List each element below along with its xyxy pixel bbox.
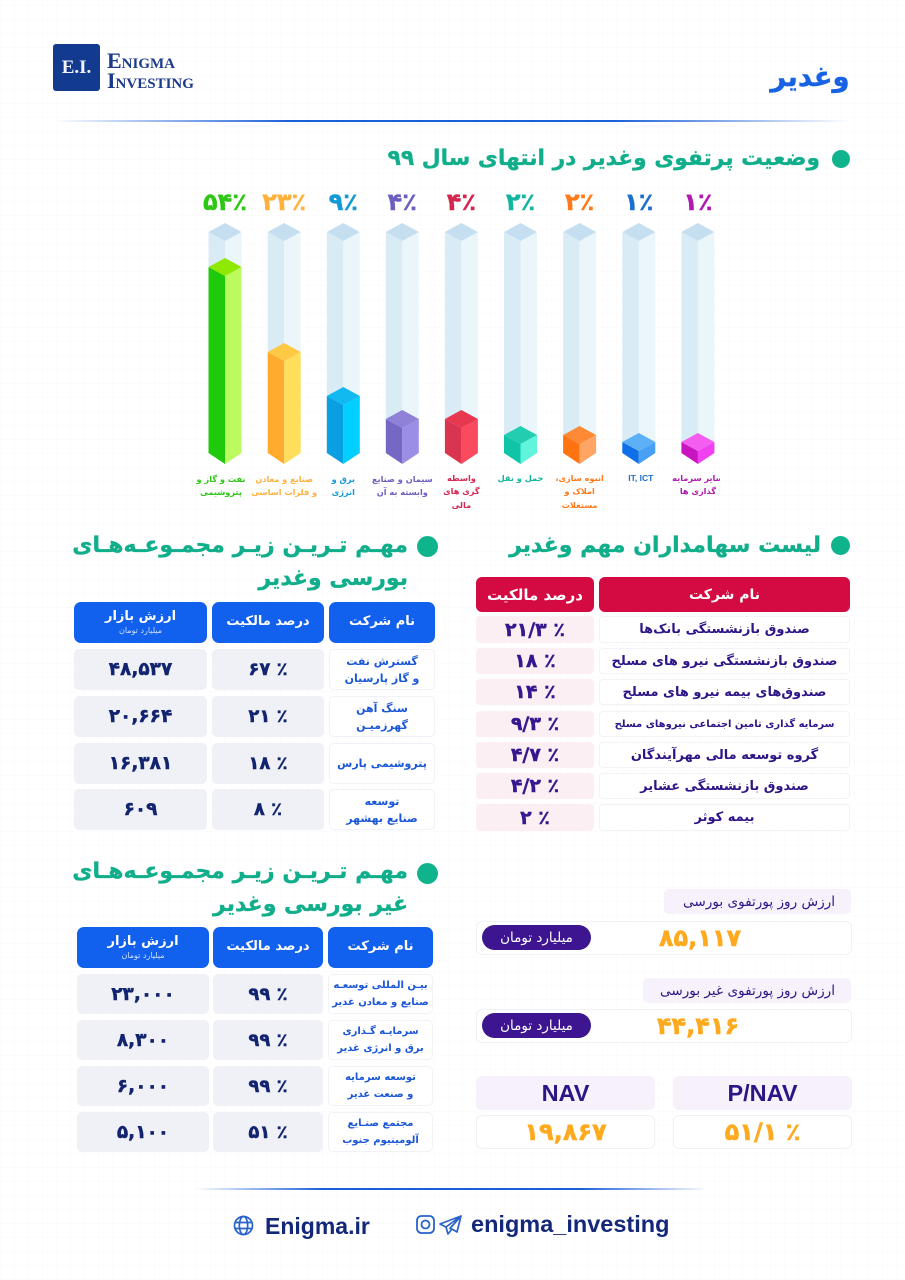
label: P/NAV xyxy=(673,1076,852,1110)
row 4 name: سرمایه گذاری تامین اجتماعی نیروهای مسلح xyxy=(615,718,834,730)
section heading: unlisted subsidiaries xyxy=(72,859,438,917)
row 2 name: صندوق بازنشستگی نیرو های مسلح xyxy=(612,654,837,668)
unit pill: billion toman xyxy=(482,1013,591,1038)
bar: cement 4%: وابسته به آن xyxy=(377,487,428,498)
bar: construction and real estate 2%: املاک و xyxy=(563,486,595,497)
bar: electricity and energy 9%: برق و xyxy=(331,474,355,485)
logo wordmark xyxy=(107,48,194,92)
panel: major shareholders xyxy=(476,533,850,831)
heading text xyxy=(72,859,408,917)
value: NAV: ۱۹,۸۶۷ xyxy=(524,1118,607,1146)
heading text: مهـم تـریـن زیـر مجمـوعـه‌هـای xyxy=(72,859,408,884)
panel: portfolio chart xyxy=(196,146,850,510)
social handle: enigma_investing xyxy=(471,1211,670,1237)
bar: transport 2%: ۲٪ xyxy=(506,188,535,216)
section heading: portfolio status xyxy=(388,146,850,171)
bar: construction and real estate 2%: انبوه سازی، xyxy=(555,473,604,484)
bar: mining and metals 23%: صنایع و معادن xyxy=(255,474,313,485)
row 1 name xyxy=(329,649,435,690)
row 1 name xyxy=(599,616,850,643)
row 4 percent xyxy=(213,1112,323,1152)
bar: oil and gas 54%: نفت و گاز و xyxy=(196,474,245,485)
logo: Enigma Investing xyxy=(53,44,194,92)
row 3 value: ۱۶,۳۸۱ xyxy=(109,753,172,774)
row 7 percent: ۲ ٪ xyxy=(520,806,550,828)
row 4 name xyxy=(599,711,850,737)
header: company name: نام شرکت xyxy=(349,614,415,629)
value: NAV xyxy=(476,1115,655,1149)
bar: construction and real estate 2%: ۲٪ xyxy=(565,188,594,216)
row 7 name: بیمه کوثر xyxy=(694,810,754,825)
row 1 name: بیـن المللی توسعـه xyxy=(333,980,428,991)
header: market value: میلیارد تومان xyxy=(121,951,165,960)
row 4 name: صنایع بهشهر xyxy=(346,812,418,824)
label: unlisted portfolio value xyxy=(643,978,851,1003)
bar: cement 4%: سیمان و صنایع xyxy=(372,474,433,485)
header: ownership percent xyxy=(212,602,324,643)
row 3 name: و صنعت غدیر xyxy=(348,1089,413,1100)
row 3 name xyxy=(599,679,850,705)
row 3 percent xyxy=(212,743,324,784)
row 5 name: گروه توسعه مالی مهرآیندگان xyxy=(631,748,818,762)
bar: oil and gas 54%: پتروشیمی xyxy=(200,487,242,498)
header: ownership percent xyxy=(476,577,594,612)
row 1 percent xyxy=(213,974,323,1014)
bar: cement 4%: ۴٪ xyxy=(388,188,417,216)
value box: unlisted portfolio xyxy=(476,1009,852,1043)
row 4 name: مجتمع صنـایع xyxy=(348,1118,414,1129)
label: listed portfolio value: ارزش روز پورتفوی بورسی xyxy=(683,894,835,910)
row 4 percent: ۹/۳ ٪ xyxy=(511,713,559,735)
row 4 value xyxy=(77,1112,209,1152)
logo mark xyxy=(53,44,100,91)
row 2 name: سنگ آهن xyxy=(356,702,408,714)
bar: financial brokerage 4%: ۴٪ xyxy=(447,188,476,216)
row 2 name: سرمایـه گـذاری xyxy=(342,1026,419,1037)
heading text: مهـم تـریـن زیـر مجمـوعـه‌هـای xyxy=(72,533,408,558)
bar: mining and metals 23%: ۲۳٪ xyxy=(262,188,306,216)
bar: transport 2% xyxy=(498,188,543,484)
value: P/NAV: ۵۱/۱ ٪ xyxy=(725,1118,800,1146)
row 3 name: پتروشیمی پارس xyxy=(337,757,427,770)
row 1 name: صندوق بازنشستگی بانک‌ها xyxy=(639,622,810,637)
header: company name xyxy=(599,577,850,612)
row 2 value xyxy=(74,696,207,737)
row 1 percent: ۲۱/۳ ٪ xyxy=(505,618,565,640)
header: ownership percent: درصد مالکیت xyxy=(487,586,583,604)
header: company name xyxy=(329,602,435,643)
website: Enigma.ir xyxy=(265,1213,370,1239)
row 2 name xyxy=(599,648,850,674)
header: market value: میلیارد تومان xyxy=(119,626,162,635)
row 4 name: توسعه xyxy=(365,794,399,808)
bar: construction and real estate 2% xyxy=(555,188,604,510)
heading text: وضعیت پرتفوی وغدیر در انتهای سال ۹۹ xyxy=(388,146,820,171)
row 4 value xyxy=(74,789,207,830)
row 4 name xyxy=(329,789,435,830)
row 7 name xyxy=(599,804,850,831)
row 1 name: و گاز پارسیان xyxy=(345,672,419,684)
bar: electricity and energy 9%: انرژی xyxy=(332,487,355,498)
header: ownership percent: درصد مالکیت xyxy=(226,939,310,954)
bar: other investments 1%: ۱٪ xyxy=(683,188,713,216)
row 3 value xyxy=(77,1066,209,1106)
row 4 percent xyxy=(212,789,324,830)
unit pill: billion toman: میلیارد تومان xyxy=(500,930,573,946)
value box: listed portfolio xyxy=(476,921,852,955)
row 2 name: گهرزمیـن xyxy=(356,718,408,732)
header: market value: ارزش بازار xyxy=(107,934,179,949)
header: market value: ارزش بازار xyxy=(105,609,176,624)
row 4 percent: ۵۱ ٪ xyxy=(248,1122,288,1142)
bar: construction and real estate 2%: مستغلات xyxy=(562,500,598,510)
heading text: غیر بورسی وغدیر xyxy=(213,892,408,917)
row 4 name: آلومینیوم جنوب xyxy=(342,1135,419,1146)
header: company name: نام شرکت xyxy=(348,939,414,954)
row 1 name: گسترش نفت xyxy=(346,654,418,668)
row 6 name: صندوق بازنشستگی عشایر xyxy=(640,778,809,794)
section heading: shareholders list xyxy=(508,533,850,558)
row 2 name xyxy=(328,1020,433,1060)
value: unlisted portfolio: ۴۴,۴۱۶ xyxy=(657,1012,739,1040)
bar: financial brokerage 4% xyxy=(443,188,480,510)
heading bullet xyxy=(832,150,850,168)
row 3 percent xyxy=(213,1066,323,1106)
label: listed portfolio value xyxy=(664,889,851,914)
row 3 percent: ۱۴ ٪ xyxy=(514,681,556,703)
row 1 percent: ۶۷ ٪ xyxy=(248,659,288,680)
row 2 percent: ۱۸ ٪ xyxy=(514,650,556,672)
unit pill: billion toman: میلیارد تومان xyxy=(500,1018,573,1034)
row 5 name xyxy=(599,742,850,768)
value: listed portfolio: ۸۵,۱۱۷ xyxy=(659,924,741,952)
unit pill: billion toman xyxy=(482,925,591,950)
bar: electricity and energy 9% xyxy=(327,188,360,498)
bar: financial brokerage 4%: واسطه xyxy=(447,473,476,484)
row 4 percent xyxy=(476,711,594,737)
label: unlisted portfolio value: ارزش روز پورتفوی غیر بورسی xyxy=(660,982,835,998)
icon: instagram xyxy=(416,1215,435,1234)
row 2 name: برق و انرژی غدیر xyxy=(337,1043,424,1054)
row 6 name xyxy=(599,773,850,799)
logo wordmark: Enigma xyxy=(107,48,175,73)
row 1 percent xyxy=(476,616,594,643)
bar: other investments 1% xyxy=(672,188,724,497)
row 1 percent xyxy=(212,649,324,690)
heading bullet xyxy=(417,536,438,557)
label: NAV: NAV xyxy=(542,1080,589,1106)
row 5 percent: ۴/۷ ٪ xyxy=(511,744,559,766)
row 1 value: ۴۸,۵۳۷ xyxy=(109,659,172,680)
row 4 percent: ۸ ٪ xyxy=(254,799,282,820)
3D bar chart xyxy=(196,188,720,510)
row 3 percent: ۹۹ ٪ xyxy=(248,1076,288,1096)
row 3 name xyxy=(328,1066,433,1106)
panel: unlisted subsidiaries xyxy=(72,859,438,1152)
row 1 value: ۲۳,۰۰۰ xyxy=(111,984,175,1004)
row 4 name xyxy=(328,1112,433,1152)
logo mark: E.I. xyxy=(62,56,91,78)
row 6 percent: ۴/۲ ٪ xyxy=(511,775,559,797)
header: company name: نام شرکت xyxy=(689,586,760,602)
row 6 percent xyxy=(476,773,594,799)
row 2 percent xyxy=(476,648,594,674)
row 3 value xyxy=(74,743,207,784)
heading text xyxy=(72,533,408,591)
row 2 percent xyxy=(212,696,324,737)
row 2 percent: ۹۹ ٪ xyxy=(248,1030,288,1050)
row 3 name: توسعه سرمایه xyxy=(345,1072,416,1083)
bar: mining and metals 23% xyxy=(251,188,317,498)
row 3 percent xyxy=(476,679,594,705)
row 3 percent: ۱۸ ٪ xyxy=(248,753,288,774)
row 5 percent xyxy=(476,742,594,768)
row 4 value: ۵,۱۰۰ xyxy=(117,1122,169,1142)
row 3 value: ۶,۰۰۰ xyxy=(117,1076,169,1096)
label: P/NAV: P/NAV xyxy=(727,1080,798,1106)
row 1 name: صنایع و معادن غدیر xyxy=(332,997,429,1008)
bar: IT, ICT 1%: IT, ICT xyxy=(628,473,654,483)
value: P/NAV xyxy=(673,1115,852,1149)
panel: listed subsidiaries xyxy=(72,533,438,830)
icon: telegram xyxy=(439,1215,462,1235)
label: NAV xyxy=(476,1076,655,1110)
bar: cement 4% xyxy=(372,188,433,498)
row 1 percent: ۹۹ ٪ xyxy=(248,984,288,1004)
bar: mining and metals 23%: و فلزات اساسی xyxy=(251,487,317,498)
row 3 name xyxy=(329,743,435,784)
header: company name xyxy=(328,927,433,968)
row 2 percent: ۲۱ ٪ xyxy=(248,706,288,727)
footer: contact links xyxy=(234,1211,670,1239)
heading bullet xyxy=(417,863,438,884)
bar: other investments 1%: گذاری ها xyxy=(680,486,716,497)
row 7 percent xyxy=(476,804,594,831)
row 2 name xyxy=(329,696,435,737)
logo wordmark: Investing xyxy=(107,68,194,92)
row 2 value: ۲۰,۶۶۴ xyxy=(109,706,172,727)
row 1 value xyxy=(77,974,209,1014)
header: ownership percent: درصد مالکیت xyxy=(226,614,310,629)
bar: IT, ICT 1% xyxy=(622,188,655,483)
bar: financial brokerage 4%: گری های xyxy=(443,486,480,497)
panel: portfolio value and NAV xyxy=(476,889,852,1149)
heading text: بورسی وغدیر xyxy=(258,566,408,591)
row 1 value xyxy=(74,649,207,690)
row 1 name xyxy=(328,974,433,1014)
bar: financial brokerage 4%: مالی xyxy=(452,500,471,510)
icon: globe xyxy=(234,1216,254,1236)
row 2 value xyxy=(77,1020,209,1060)
header: market value xyxy=(74,602,207,643)
bar: IT, ICT 1%: ۱٪ xyxy=(624,188,653,216)
header: market value xyxy=(77,927,209,968)
bar: transport 2%: حمل و نقل xyxy=(498,473,543,484)
row 3 name: صندوق‌های بیمه نیرو های مسلح xyxy=(623,684,826,700)
header: ownership percent xyxy=(213,927,323,968)
row 4 value: ۶۰۹ xyxy=(124,799,157,820)
heading text: لیست سهامداران مهم وغدیر xyxy=(509,533,821,558)
bar: oil and gas 54% xyxy=(196,188,247,498)
section heading: listed subsidiaries xyxy=(72,533,438,591)
bar: electricity and energy 9%: ۹٪ xyxy=(329,188,358,216)
heading bullet xyxy=(831,536,850,555)
page title: وغدیر xyxy=(770,61,850,93)
row 2 percent xyxy=(213,1020,323,1060)
row 2 value: ۸,۳۰۰ xyxy=(117,1030,169,1050)
bar: oil and gas 54%: ۵۴٪ xyxy=(203,188,247,216)
